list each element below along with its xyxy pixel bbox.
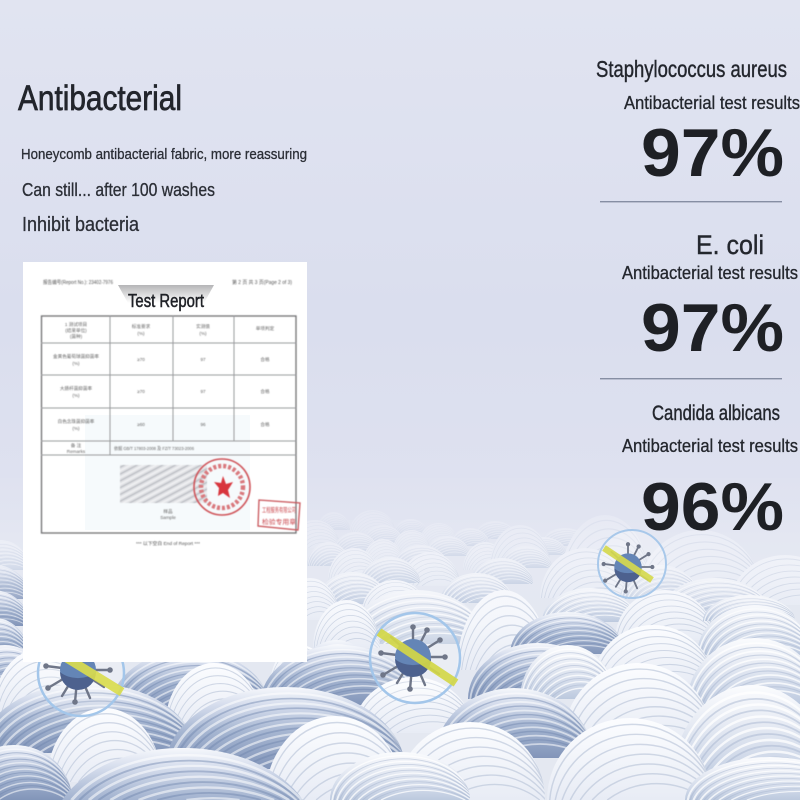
result: Candida albicans <box>622 402 798 545</box>
report table <box>41 316 296 533</box>
report table: Remarks <box>67 449 86 454</box>
report table: (结果单位) <box>65 327 87 334</box>
report header: 报告编号(Report No.): 23402-7976 <box>43 279 113 286</box>
title: Antibacterial <box>18 79 182 118</box>
report table: 样品 <box>163 508 173 515</box>
result: Staphylococcus aureus: 97% <box>641 115 784 191</box>
divider <box>600 378 782 379</box>
square red stamp: 工程服务有限公司 <box>262 505 296 514</box>
result: Candida albicans: 96% <box>641 469 784 545</box>
text block: fabric description: Inhibit bacteria <box>22 214 140 236</box>
report table: 单项判定 <box>256 325 275 332</box>
divider <box>600 201 782 202</box>
square red stamp <box>258 500 300 530</box>
report table: 备 注 <box>71 442 82 449</box>
text block: fabric description <box>21 146 307 236</box>
report heading: Test Report <box>128 291 204 311</box>
result: E. coli: 97% <box>641 290 784 366</box>
report table: 合格 <box>260 356 270 363</box>
report table: Sample <box>160 515 176 520</box>
fabric sample photo <box>120 465 207 503</box>
result: Staphylococcus aureus <box>596 56 800 191</box>
icon: virus in bubble, centre <box>370 613 460 703</box>
report table: 97 <box>200 389 206 394</box>
icon: virus in bubble, left <box>38 630 124 716</box>
report table: (%) <box>72 361 80 366</box>
square red stamp: 检验专用章 <box>262 517 297 526</box>
report table: (%) <box>199 331 207 336</box>
report table: (%) <box>137 331 145 336</box>
fabric honeycomb surface <box>0 510 800 800</box>
report table: 白色念珠菌抑菌率 <box>58 418 95 425</box>
report table: ≥70 <box>137 389 145 394</box>
report table: 1 测试项目 <box>65 321 87 328</box>
report table: ≥60 <box>137 422 145 427</box>
report header: 第 2 页 共 3 页(Page 2 of 3) <box>232 279 292 286</box>
round red stamp <box>194 459 250 515</box>
report header <box>43 279 292 286</box>
report table: 合格 <box>260 421 270 428</box>
report table: 依据 GB/T 17803-2008 及 FZ/T 73023-2006 <box>114 445 194 452</box>
report table: ≥70 <box>137 357 145 362</box>
report watermark <box>85 415 250 530</box>
result: E. coli <box>622 230 798 366</box>
report table: 实测值 <box>196 323 210 330</box>
text block: fabric description: Can still... after 100 washes <box>22 180 215 200</box>
report table: 大肠杆菌抑菌率 <box>60 385 92 392</box>
result: E. coli: E. coli <box>696 230 764 260</box>
text block: fabric description: Honeycomb antibacterial fabric, more reassuring <box>21 146 307 163</box>
report heading <box>118 285 214 311</box>
report table: 金黄色葡萄球菌抑菌率 <box>53 353 99 360</box>
panel: test report <box>23 262 307 662</box>
report table: 合格 <box>260 388 270 395</box>
icon: virus in bubble, right <box>598 530 666 598</box>
end of report note: *** 以下空白 End of Report *** <box>136 540 200 547</box>
report table: 标准要求 <box>132 323 151 330</box>
report table: (菌种) <box>70 333 83 340</box>
fabric fade into background <box>0 478 800 623</box>
report table: (%) <box>72 393 80 398</box>
report table: (%) <box>72 426 80 431</box>
report table: 97 <box>200 357 206 362</box>
report table: 96 <box>200 422 206 427</box>
